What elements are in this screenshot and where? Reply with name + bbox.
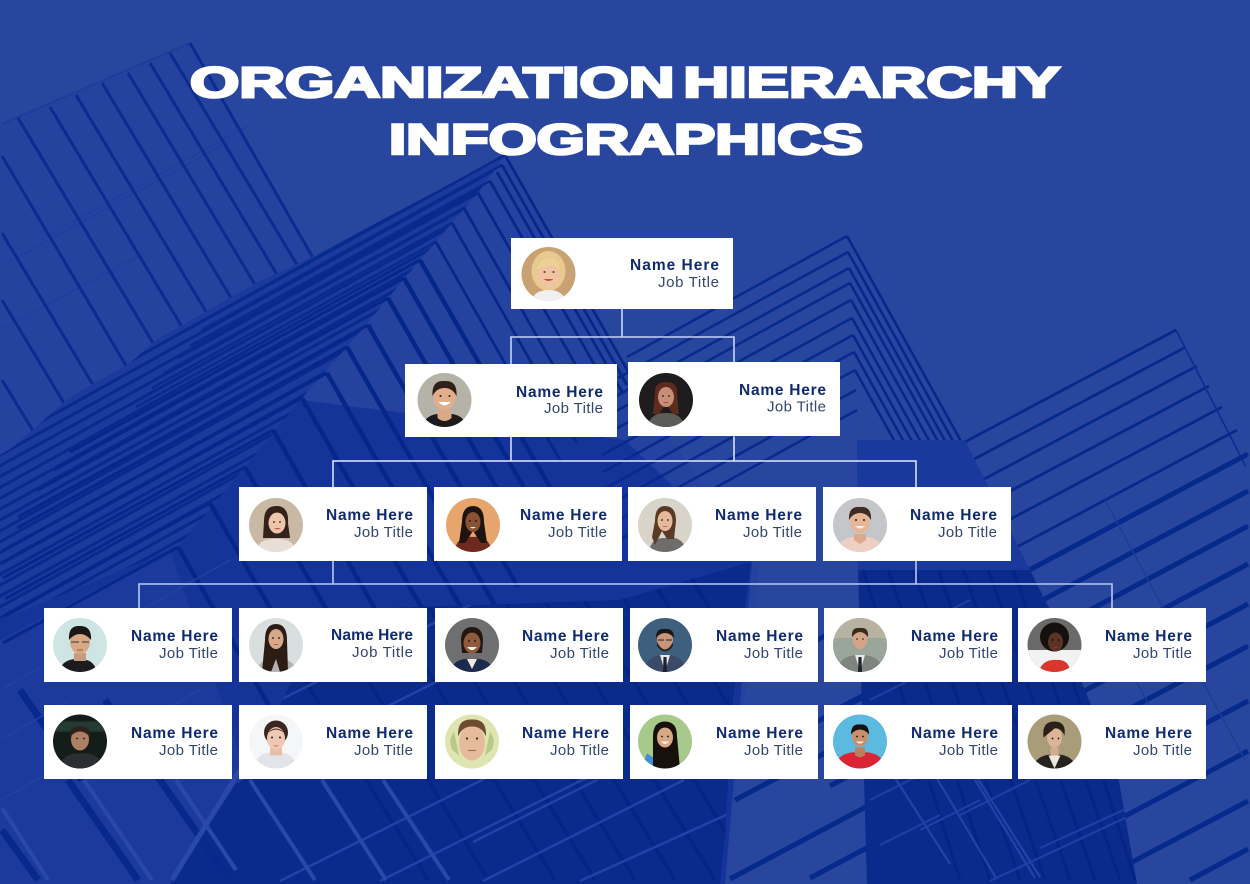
card: level 3 fourth: [823, 487, 1011, 561]
avatar: man close-up: [445, 714, 499, 768]
card: row 4 first: [44, 608, 232, 682]
title: [190, 59, 1060, 164]
card: level 2 right: [628, 362, 840, 436]
avatar: young man khaki background: [1028, 714, 1082, 768]
card: row 5 first: [44, 705, 232, 779]
job title: Job Title: [159, 742, 218, 759]
card: row 5 fourth: [630, 705, 818, 779]
name: Name Here: [331, 627, 413, 644]
name: Name Here: [630, 257, 719, 274]
avatar: woman orange background: [446, 498, 500, 552]
avatar: man dark background: [53, 714, 107, 768]
job title: Job Title: [743, 524, 802, 541]
name: Name Here: [326, 725, 413, 742]
title: INFOGRAPHICS: [389, 116, 863, 164]
card: row 5 second: [239, 705, 427, 779]
name: Name Here: [522, 628, 609, 645]
avatar: woman afro red dress: [1028, 618, 1082, 672]
name: Name Here: [1105, 725, 1192, 742]
avatar: man in grey suit outdoors: [833, 618, 887, 672]
card: row 4 sixth: [1018, 608, 1206, 682]
avatar: woman long dark hair: [249, 618, 303, 672]
job title: Job Title: [938, 524, 997, 541]
card: row 4 fourth: [630, 608, 818, 682]
job title: Job Title: [939, 742, 998, 759]
avatar: bearded man in suit: [638, 618, 692, 672]
name: Name Here: [326, 507, 413, 524]
name: Name Here: [911, 628, 998, 645]
name: Name Here: [911, 725, 998, 742]
card: row 4 third: [435, 608, 623, 682]
card: row 5 sixth: [1018, 705, 1206, 779]
name: Name Here: [715, 507, 802, 524]
name: Name Here: [131, 725, 218, 742]
connector lines: [139, 309, 1112, 608]
job title: Job Title: [744, 645, 803, 662]
name: Name Here: [716, 628, 803, 645]
card: level 3 second: [434, 487, 622, 561]
job title: Job Title: [544, 400, 603, 417]
job title: Job Title: [1133, 645, 1192, 662]
avatar: woman long brown hair: [638, 498, 692, 552]
job title: Job Title: [159, 645, 218, 662]
job title: Job Title: [1133, 742, 1192, 759]
avatar: smiling man: [418, 373, 472, 427]
card: top executive: [511, 238, 733, 309]
avatar: woman in green garden: [638, 714, 692, 768]
avatar: smiling woman navy blazer: [445, 618, 499, 672]
name: Name Here: [520, 507, 607, 524]
card: level 2 left: [405, 364, 617, 437]
job title: Job Title: [939, 645, 998, 662]
name: Name Here: [739, 382, 826, 399]
card: row 4 fifth: [824, 608, 1012, 682]
job title: Job Title: [354, 524, 413, 541]
job title: Job Title: [550, 645, 609, 662]
name: Name Here: [522, 725, 609, 742]
card: row 5 fifth: [824, 705, 1012, 779]
avatar: man pink shirt: [833, 498, 887, 552]
avatar: blonde woman: [522, 247, 576, 301]
card: row 4 second: [239, 608, 427, 682]
avatar: man with glasses: [53, 618, 107, 672]
name: Name Here: [716, 725, 803, 742]
avatar: woman beige background: [249, 498, 303, 552]
card: level 3 first: [239, 487, 427, 561]
job title: Job Title: [354, 742, 413, 759]
job title: Job Title: [767, 398, 826, 416]
name: Name Here: [516, 384, 603, 401]
job title: Job Title: [744, 742, 803, 759]
card: level 3 third: [628, 487, 816, 561]
card: row 5 third: [435, 705, 623, 779]
title: ORGANIZATION HIERARCHY: [190, 59, 1060, 107]
name: Name Here: [131, 628, 218, 645]
job title: Job Title: [550, 742, 609, 759]
job title: Job Title: [548, 524, 607, 541]
avatar: woman white background: [249, 714, 303, 768]
name: Name Here: [910, 507, 997, 524]
job title: Job Title: [352, 644, 413, 661]
name: Name Here: [1105, 628, 1192, 645]
avatar: woman on dark background: [639, 373, 693, 427]
avatar: man red polo blue background: [833, 714, 887, 768]
job title: Job Title: [658, 274, 719, 291]
